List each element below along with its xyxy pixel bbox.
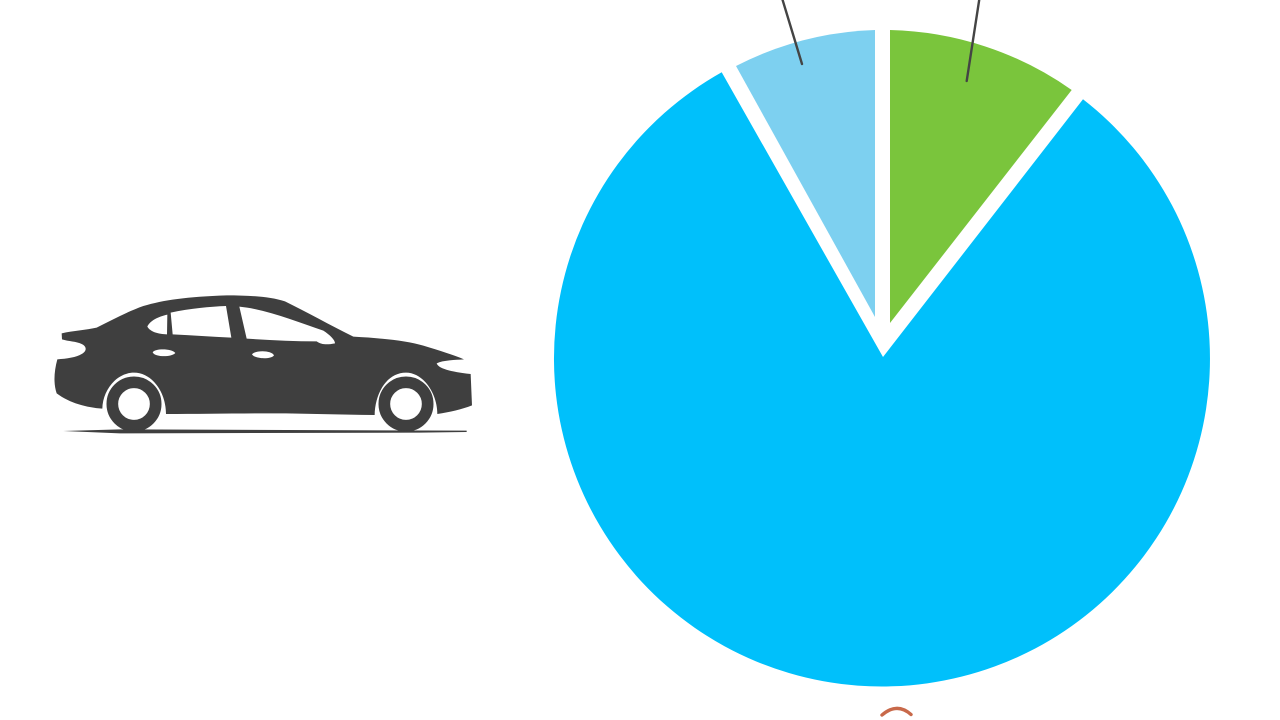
pie slice: large blue <box>554 72 1210 686</box>
rear wheel <box>112 382 156 426</box>
leader line: light blue slice <box>782 0 802 64</box>
pie slice: green <box>890 30 1072 323</box>
partial orange arc at bottom <box>882 708 911 715</box>
ground line <box>63 429 467 433</box>
leader line: green slice <box>967 0 980 81</box>
car body <box>54 295 472 415</box>
icon: car silhouette <box>54 295 472 433</box>
pie slice: light blue <box>736 30 875 317</box>
pie chart <box>554 30 1210 686</box>
front wheel <box>384 382 428 426</box>
